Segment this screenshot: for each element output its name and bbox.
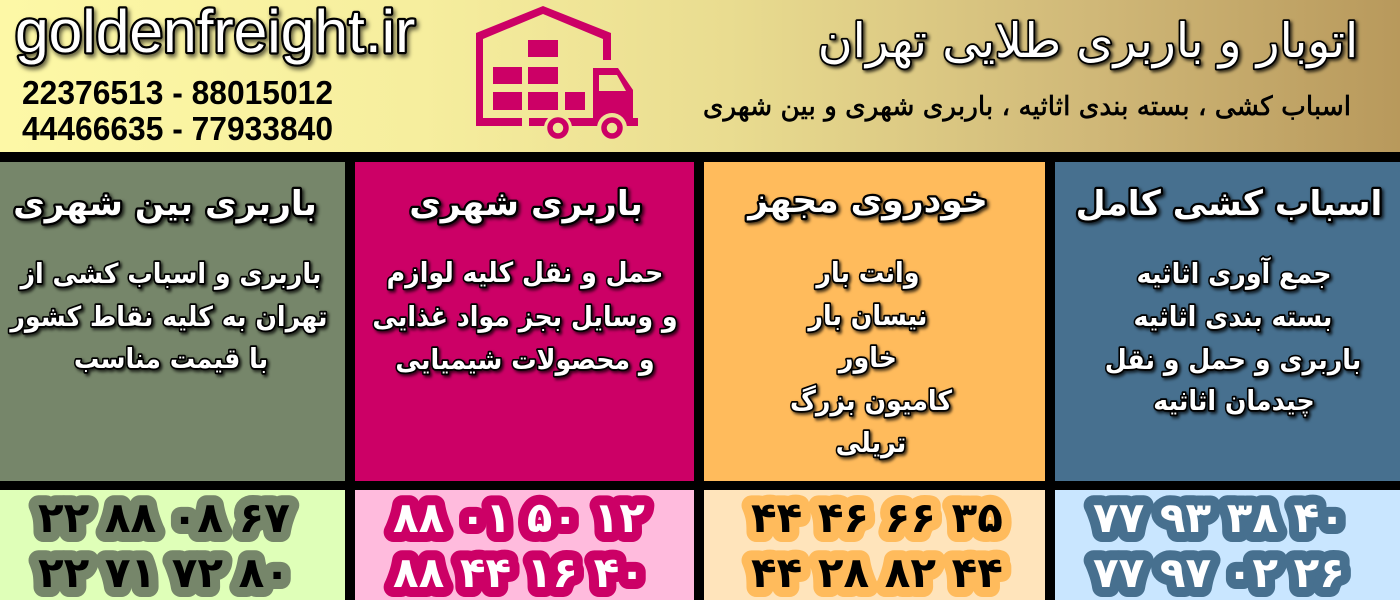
subtitle: اسباب کشی ، بسته بندی اثاثیه ، باربری شهری و بین شهری: [703, 92, 1351, 122]
heading: اسباب کشی کامل: [1076, 184, 1382, 224]
vehicle list: تریلی: [836, 427, 906, 459]
phone panel: city: [355, 490, 694, 600]
phone numbers: [38, 493, 290, 597]
phone numbers: ۲۲ ۸۸ ۰۸ ۶۷: [38, 493, 290, 542]
description: و وسایل بجز مواد غذایی: [372, 301, 678, 333]
description: [8, 258, 328, 375]
service list: باربری و حمل و نقل: [1105, 344, 1361, 376]
phone panel: intercity: [0, 490, 345, 600]
phone numbers: ۷۷ ۹۷ ۰۲ ۲۶: [1093, 548, 1345, 597]
panel: city freight: [355, 162, 694, 481]
service list: بسته بندی اثاثیه: [1134, 301, 1332, 333]
phone numbers: 44466635 - 77933840: [22, 110, 333, 147]
phone numbers: ۴۴ ۴۶ ۶۶ ۳۵: [751, 493, 1003, 542]
description: باربری و اسباب کشی از: [19, 258, 321, 290]
phone numbers: ۲۲ ۷۱ ۷۲ ۸۰: [38, 548, 290, 597]
service list: جمع آوری اثاثیه: [1137, 256, 1331, 290]
phone numbers: [751, 493, 1003, 597]
phone numbers: 22376513 - 88015012: [22, 74, 333, 111]
panel: full moving service: [1055, 162, 1400, 481]
phone panel: moving: [1055, 490, 1400, 600]
header band: [0, 0, 1400, 152]
phone numbers: [22, 74, 333, 147]
vehicle list: خاور: [837, 342, 897, 374]
description: و محصولات شیمیایی: [395, 344, 655, 376]
phone numbers: ۴۴ ۲۸ ۸۲ ۴۴: [751, 548, 1003, 597]
phone numbers: ۸۸ ۰۱ ۵۰ ۱۲: [393, 493, 645, 542]
description: [372, 257, 678, 376]
phone numbers: [1093, 493, 1345, 597]
panel: intercity freight: [0, 162, 345, 481]
heading: باربری بین شهری: [13, 184, 317, 224]
service list: [1105, 256, 1361, 417]
icon: warehouse and truck logo: [476, 6, 638, 136]
vehicle list: کامیون بزرگ: [790, 385, 953, 417]
heading: خودروی مجهز: [746, 181, 988, 221]
heading: باربری شهری: [409, 184, 643, 224]
description: با قیمت مناسب: [74, 343, 268, 375]
phone numbers: ۷۷ ۹۳ ۳۸ ۴۰: [1093, 493, 1345, 542]
service list: چیدمان اثاثیه: [1153, 385, 1315, 417]
vehicle list: [790, 257, 953, 459]
phone numbers: [393, 493, 645, 597]
vehicle list: وانت بار: [815, 257, 919, 289]
phone panel: vehicles: [704, 490, 1045, 600]
main title: اتوبار و باربری طلایی تهران: [818, 14, 1358, 69]
description: تهران به کلیه نقاط کشور: [8, 301, 328, 333]
description: حمل و نقل کلیه لوازم: [387, 257, 663, 289]
vehicle list: نیسان بار: [807, 300, 927, 332]
phone numbers: ۸۸ ۴۴ ۱۶ ۴۰: [393, 548, 645, 597]
panel: equipped vehicles: [704, 162, 1045, 481]
